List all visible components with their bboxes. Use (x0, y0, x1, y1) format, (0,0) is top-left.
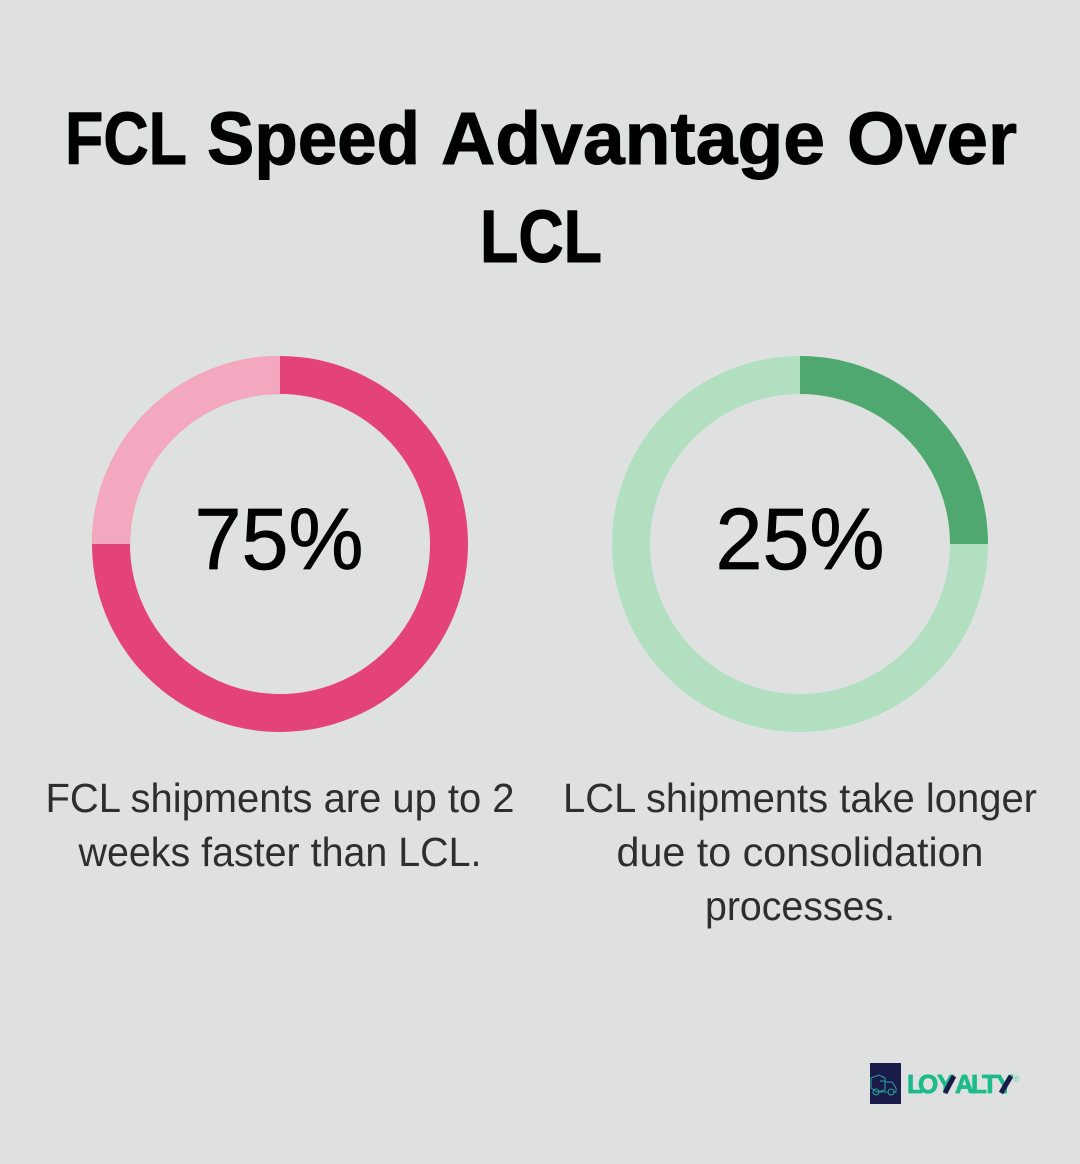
wordmark accents (945, 1076, 1011, 1093)
title: Speed (207, 97, 420, 180)
caption: FCL (46, 775, 514, 875)
value: 75%: 75% (194, 491, 364, 588)
donut chart: 25% (631, 375, 969, 713)
title (65, 97, 1017, 278)
caption: LCL: LCL shipments take longer (563, 775, 1037, 821)
panel: LCL 25% (563, 375, 1037, 929)
caption: FCL: FCL shipments are up to 2 (46, 775, 514, 821)
title: Over (847, 97, 1017, 180)
wordmark: LOYALTY (907, 1069, 1013, 1099)
title: LCL (480, 195, 602, 278)
donut chart: 75% (111, 375, 449, 713)
caption: LCL: due to consolidation (616, 829, 984, 875)
title: FCL (65, 97, 187, 180)
panel: FCL 75% (46, 375, 514, 875)
logo: Loyalty (870, 1063, 1020, 1104)
value: 25%: 25% (716, 491, 884, 588)
registered mark: ® (1013, 1074, 1020, 1084)
caption: LCL: processes. (705, 883, 895, 929)
caption: LCL (563, 775, 1037, 929)
caption: FCL: weeks faster than LCL. (78, 829, 482, 875)
icon: truck (870, 1063, 901, 1104)
title: Advantage (441, 97, 825, 180)
